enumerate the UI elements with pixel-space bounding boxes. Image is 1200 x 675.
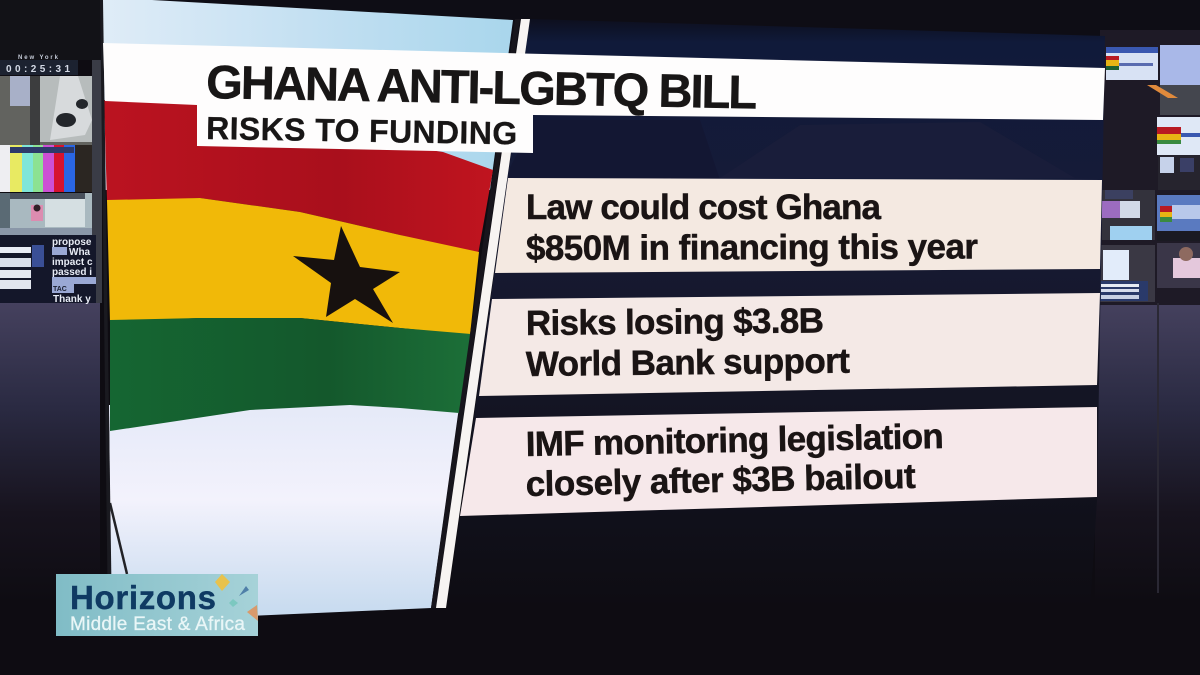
flag red stripe [104,100,493,255]
diagonal black stripe [431,19,520,608]
colour bars [0,145,92,192]
clock: New York [18,55,59,61]
panel: IMF monitoring: closely after $3B bailout [525,457,916,504]
right monitor wall [1100,45,1200,302]
flag yellow stripe [107,198,479,335]
panel: IMF monitoring: IMF monitoring legislation [525,417,944,464]
subheading: RISKS TO FUNDING [206,110,517,151]
logo: Horizons Middle East & Africa: Horizons [70,579,216,616]
icon: black star [293,226,400,323]
screen: blue display with flag [1157,195,1200,241]
sky lower [109,400,460,622]
panel: $850M financing: $850M in financing this year [526,227,978,268]
title band [103,43,1105,153]
icon: teal kite [229,599,238,607]
icon: yellow kite [215,574,230,591]
script monitor: passed i [52,267,92,278]
script monitor: Thank y [53,294,91,305]
presenter feed [0,193,92,235]
panel: $850M financing: Law could cost Ghana [526,188,882,227]
panel: $850M financing [495,178,1102,273]
icon: blue kite [239,586,249,596]
panel: World Bank support [479,293,1100,396]
screen: periwinkle display [1147,45,1200,115]
script monitor [0,235,96,305]
sky upper [102,0,513,190]
screen: white square and bars [1100,245,1155,302]
logo: Horizons Middle East & Africa [56,574,258,636]
script monitor: propose [52,237,92,248]
script monitor: impact c [52,257,93,268]
screen: graphic with flag 2 [1157,117,1200,190]
panel: World Bank support: Risks losing $3.8B [526,301,824,343]
screen: graphic with flag [1106,47,1158,80]
right navy panel [447,19,1105,610]
screen: presenter [1157,243,1200,288]
script monitor: Wha [69,247,91,258]
logo: Horizons Middle East & Africa: Middle East & Africa [70,614,245,635]
camera feed [0,76,92,145]
heading: GHANA ANTI-LGBTQ BILL [206,55,758,119]
left monitor wall [0,55,96,305]
clock: 00:25:31 [6,64,70,75]
diagonal white stripe [436,19,530,608]
icon: orange kite [247,605,258,621]
screen: small feeds [1102,190,1155,240]
script monitor: TAC [53,286,67,293]
Ghana flag photo panel [100,0,513,622]
clock [0,55,78,75]
navy facet shapes [505,120,1075,180]
flag green stripe [110,318,471,431]
panel: IMF monitoring [460,407,1097,516]
left frame edge [100,0,112,622]
panel: World Bank support: World Bank support [526,342,850,384]
flagpole [110,503,127,574]
